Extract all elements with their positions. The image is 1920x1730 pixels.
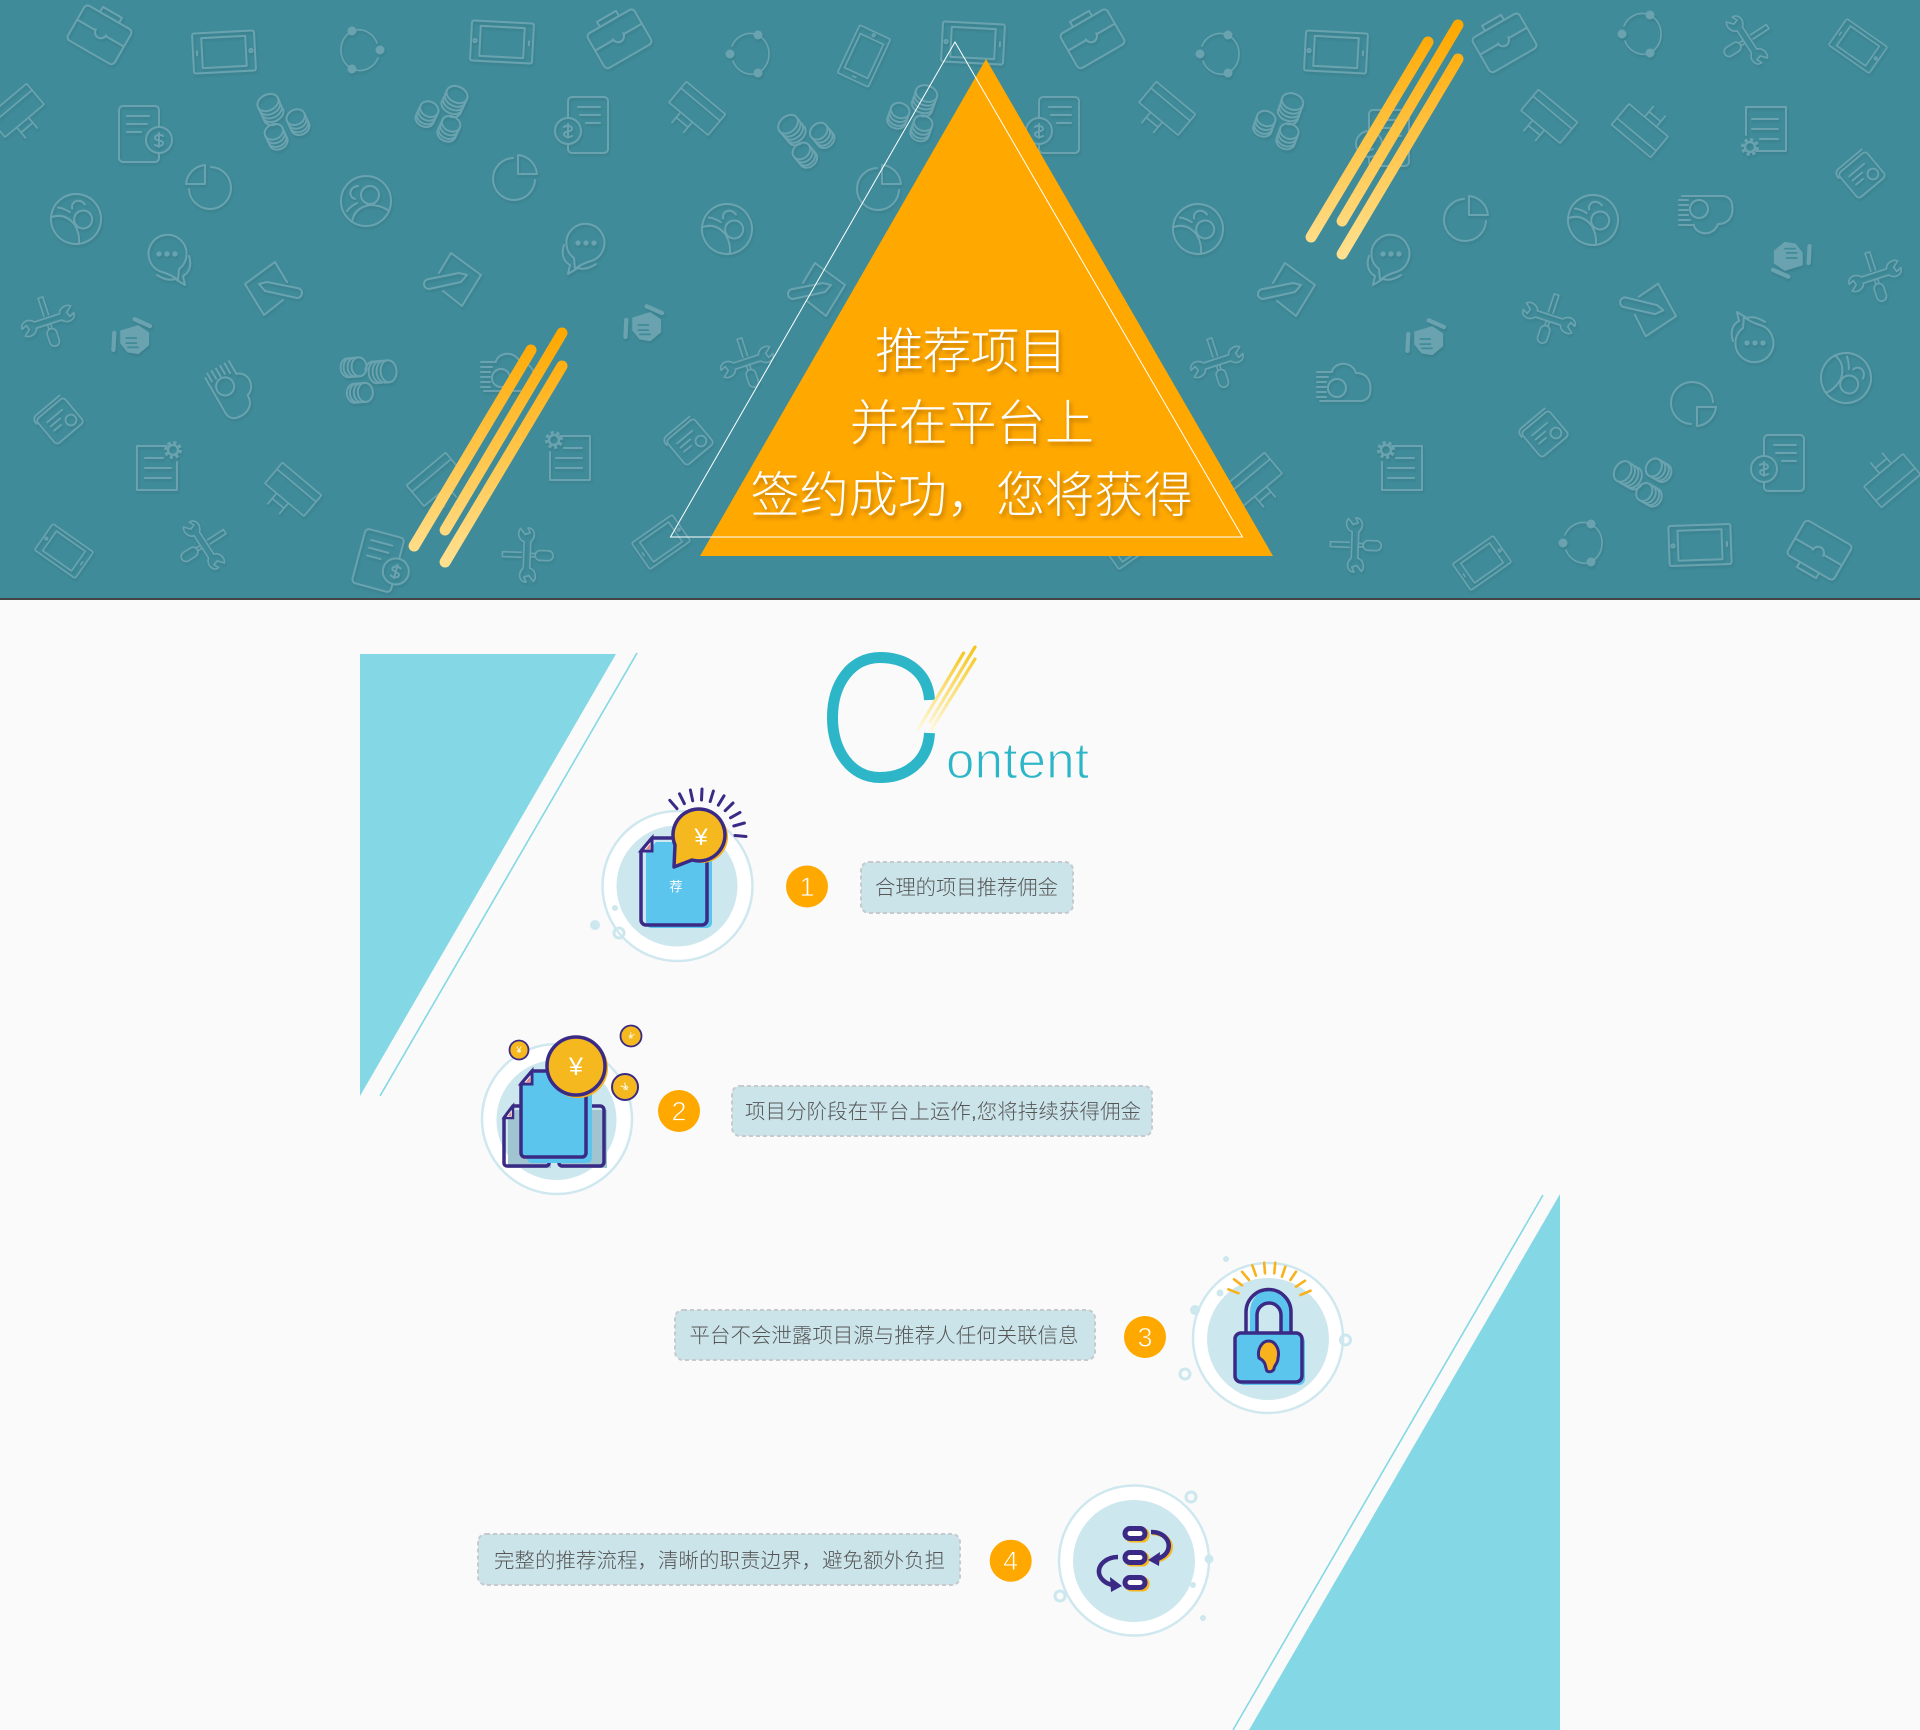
item 2 — [482, 1026, 1152, 1194]
banner heading: 并在平台上 — [850, 397, 1094, 451]
right orange stripes — [1311, 25, 1458, 254]
number badge 2: 2 — [671, 1096, 687, 1126]
text box 4 — [478, 1534, 960, 1585]
icon: documents with coins: ¥ — [568, 1053, 583, 1081]
background icon pattern — [0, 0, 1920, 598]
number badge 2 — [658, 1090, 700, 1132]
number badge 4 — [990, 1540, 1032, 1582]
icon: document with yen bubble: ¥ — [693, 824, 708, 851]
item 4 — [478, 1486, 1214, 1636]
icon: document with yen bubble — [590, 789, 752, 961]
icon: documents with coins: ¥ — [619, 1081, 633, 1095]
content section background — [0, 600, 1920, 1730]
icon: documents with coins: ¥ — [515, 1045, 522, 1055]
number badge 1 — [786, 866, 828, 908]
icon: document with yen bubble: 荐 — [669, 879, 683, 894]
banner bottom divider — [0, 598, 1920, 600]
icon: padlock — [1180, 1256, 1350, 1413]
left orange stripes — [414, 333, 562, 562]
number badge 3: 3 — [1137, 1322, 1153, 1352]
white outline triangle — [670, 42, 1242, 537]
text box 1 — [861, 862, 1073, 913]
number badge 1: 1 — [799, 872, 815, 902]
item 1 — [590, 789, 1073, 961]
item 3 — [675, 1256, 1350, 1413]
text box 2 — [732, 1086, 1152, 1136]
Content logo: ontent — [946, 732, 1089, 789]
text box 1: 合理的项目推荐佣金 — [875, 876, 1058, 900]
text box 2: 项目分阶段在平台上运作,您将持续获得佣金 — [745, 1100, 1141, 1124]
icon: process flow — [1055, 1486, 1214, 1636]
icon: documents with coins — [482, 1026, 642, 1194]
banner background — [0, 0, 1920, 599]
banner heading: 签约成功，您将获得 — [750, 469, 1192, 523]
Content logo — [832, 647, 1089, 789]
banner heading: 推荐项目 — [875, 325, 1067, 379]
orange triangle — [700, 59, 1273, 556]
text box 3 — [675, 1310, 1095, 1360]
number badge 3 — [1124, 1316, 1166, 1358]
icon: documents with coins: ¥ — [625, 1030, 637, 1042]
top-left cyan triangle — [360, 653, 637, 1096]
banner heading — [750, 325, 1192, 523]
bottom-right cyan triangle — [1233, 1194, 1560, 1730]
text box 4: 完整的推荐流程，清晰的职责边界，避免额外负担 — [494, 1550, 945, 1572]
text box 3: 平台不会泄露项目源与推荐人任何关联信息 — [690, 1324, 1078, 1348]
number badge 4: 4 — [1003, 1546, 1018, 1576]
